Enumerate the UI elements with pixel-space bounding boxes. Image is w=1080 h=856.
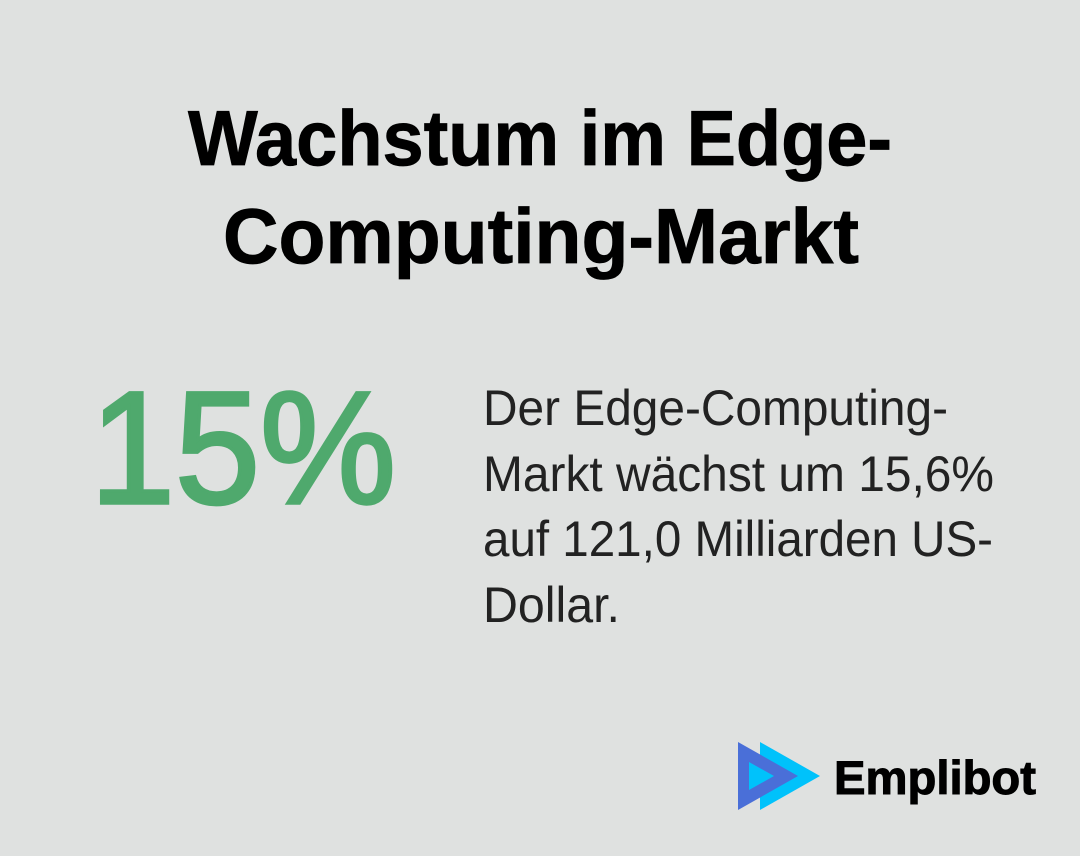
title — [188, 94, 892, 280]
big stat: 15%: 15% — [90, 358, 396, 537]
description text: Der Edge-Computing- — [483, 380, 948, 436]
icon: play arrows — [738, 742, 820, 810]
title: Wachstum im Edge- — [188, 94, 892, 182]
title: Computing-Markt — [223, 192, 859, 280]
description text — [483, 380, 994, 633]
wordmark: Emplibot — [834, 751, 1036, 804]
description text: auf 121,0 Milliarden US- — [483, 511, 993, 567]
description text: Markt wächst um 15,6% — [483, 446, 994, 502]
logo: Emplibot — [738, 742, 1036, 810]
description text: Dollar. — [483, 577, 620, 633]
